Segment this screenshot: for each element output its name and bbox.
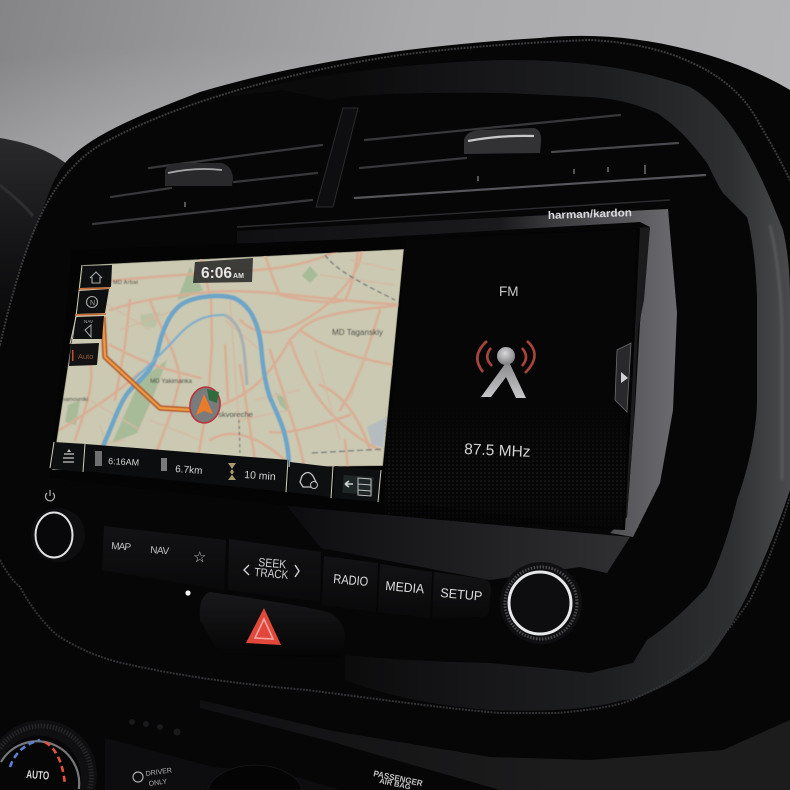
map: current position marker <box>187 385 223 425</box>
icon: star: ☆ <box>193 549 206 566</box>
vent fins <box>185 165 645 207</box>
icon: radio antenna <box>477 341 535 398</box>
map river <box>103 296 289 465</box>
map button: nav voice: NAV <box>84 319 94 324</box>
vent: center divider post <box>316 108 358 207</box>
map route info bar <box>83 444 289 492</box>
screen glass <box>50 228 640 530</box>
screen edge light lines <box>50 265 381 502</box>
seek track button: TRACK <box>254 565 289 582</box>
dial temperature scale <box>10 740 65 785</box>
map water patch <box>367 417 387 447</box>
left seat / dash curve <box>0 138 68 345</box>
status light <box>185 590 191 596</box>
radio button: RADIO <box>333 571 369 589</box>
map parks <box>65 266 318 443</box>
passenger air bag label: PASSENGER <box>373 768 424 788</box>
driver only button: DRIVER <box>145 767 172 778</box>
lower leather panel <box>200 700 790 790</box>
airflow icons <box>129 719 180 736</box>
vent: left knob <box>165 163 233 186</box>
left volume knob <box>31 508 85 562</box>
NAV button label: NAV <box>150 545 170 557</box>
map button: auto: Auto <box>78 352 93 361</box>
hazard button <box>200 592 345 658</box>
button strip: map nav favourite <box>102 526 226 590</box>
map button: nav voice <box>73 316 104 339</box>
driver only button <box>133 767 172 788</box>
arrival time: 6:16AM <box>108 456 139 468</box>
map bottom menu button <box>52 442 86 472</box>
map navigation route <box>103 317 192 410</box>
head unit upper strip <box>237 200 670 227</box>
icon: power symbol <box>46 490 54 501</box>
map button: compass <box>76 289 109 314</box>
icon: hazard triangle <box>246 608 281 645</box>
side panel arrow tab <box>615 343 631 412</box>
panel: navigation map <box>52 249 404 470</box>
map button: traffic <box>288 462 332 497</box>
radio frequency: 87.5 MHz <box>464 441 531 461</box>
map button edge route accents <box>75 288 110 315</box>
MAP button label: MAP <box>111 541 132 553</box>
distance: 6.7km <box>175 464 203 477</box>
seek track button <box>228 539 321 602</box>
leather lower stitching <box>0 497 790 713</box>
map dashed boundary <box>325 255 395 300</box>
climate temperature dial <box>0 720 97 790</box>
remaining time <box>228 463 276 483</box>
map button: home <box>80 265 112 288</box>
map place labels: MD Yakimanka <box>150 378 192 385</box>
radio button <box>322 556 378 612</box>
setup button: SETUP <box>440 585 483 604</box>
remaining time: 10 min <box>244 469 276 483</box>
map place labels: skvoreche <box>218 412 253 419</box>
map place labels: MD Arbat <box>113 280 138 286</box>
map roads <box>60 250 404 470</box>
map place labels: MD Taganskiy <box>332 328 383 337</box>
harman/kardon logo: harman/kardon <box>548 207 632 222</box>
right tuning knob <box>500 562 582 644</box>
vent: right knob <box>464 128 541 154</box>
right and lower trim band <box>222 60 790 711</box>
map clock: 6:06AM <box>201 265 244 282</box>
driver only button: ONLY <box>148 778 168 788</box>
seek track button: SEEK <box>258 555 287 571</box>
vent: slats <box>93 115 705 224</box>
leather top rim stitching <box>0 40 790 345</box>
distance <box>161 458 203 477</box>
map button: split view <box>333 466 380 502</box>
media button: MEDIA <box>385 578 425 596</box>
center lower vent knob <box>208 765 302 790</box>
map place labels <box>62 280 383 419</box>
setup button <box>432 572 491 618</box>
silver screen surround <box>237 209 677 537</box>
map button: auto <box>69 343 99 366</box>
map button: compass: N <box>90 300 95 307</box>
radio band label: FM <box>499 284 518 299</box>
control panel fascia <box>287 506 630 580</box>
lower climate panel <box>105 738 340 790</box>
dial label: AUTO <box>26 769 50 783</box>
panel: radio display <box>385 286 632 530</box>
map place labels: hamovniki <box>62 397 88 403</box>
map clock <box>193 258 253 283</box>
arrival time <box>95 451 139 468</box>
media button <box>378 564 432 618</box>
